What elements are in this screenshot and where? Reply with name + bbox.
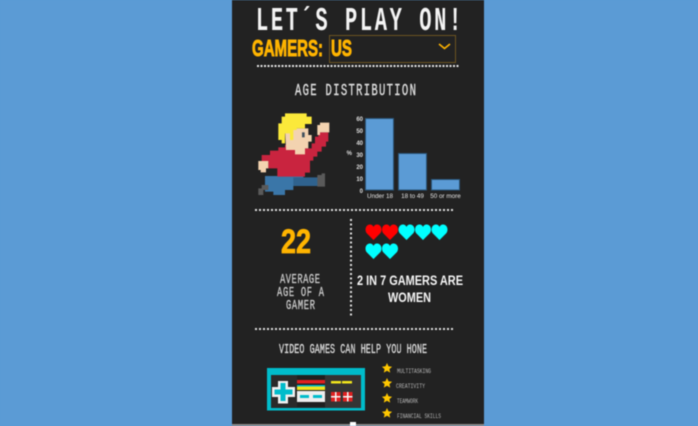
icon: stars <box>382 363 392 418</box>
y axis labels: 0 <box>360 189 364 195</box>
y axis labels: 30 <box>356 153 364 159</box>
stat: 2 in 7 gamers are women: WOMEN <box>388 290 431 305</box>
y axis labels: 20 <box>356 165 364 171</box>
x axis labels: Under 18 <box>367 193 393 200</box>
stat caption: AGE OF A <box>277 287 324 301</box>
chart bars <box>366 118 460 190</box>
selector label: GAMERS: <box>252 35 323 61</box>
stat: 2 in 7 gamers are women <box>357 273 463 305</box>
skill labels: CREATIVITY <box>396 383 425 390</box>
stat: average age <box>277 223 324 314</box>
heading: age distribution: AGE DISTRIBUTION <box>295 82 416 101</box>
skill labels: MULTITASKING <box>397 368 431 375</box>
stat caption: GAMER <box>286 300 315 314</box>
heading: skills: VIDEO GAMES CAN HELP YOU HONE <box>279 343 427 358</box>
skill labels: FINANCIAL SKILLS <box>397 413 441 420</box>
stat caption <box>277 274 324 314</box>
title: LET´S PLAY ON! <box>256 4 461 41</box>
x axis labels: 18 to 49 <box>401 193 424 200</box>
stat caption: AVERAGE <box>280 274 320 288</box>
icon: game controller <box>267 368 365 410</box>
y axis labels: 60 <box>356 117 364 123</box>
y axis labels: 10 <box>356 177 364 183</box>
stat: 2 in 7 gamers are women: 2 IN 7 GAMERS ARE <box>357 273 463 288</box>
skill labels <box>396 368 441 420</box>
stat value: 22 <box>281 223 311 261</box>
skills list <box>382 363 441 420</box>
hearts: women gamers <box>366 224 448 259</box>
y axis labels: % <box>347 151 353 157</box>
y axis labels: 40 <box>356 141 364 147</box>
skill labels: TEAMWORK <box>397 398 418 405</box>
y axis labels: 50 <box>356 129 364 135</box>
y axis labels <box>347 117 364 195</box>
selector value: US <box>331 35 352 61</box>
x axis labels: 50 or more <box>430 193 461 200</box>
icon: chevron <box>439 44 450 48</box>
x axis labels <box>367 193 461 200</box>
country selector <box>252 35 456 62</box>
icon: running pixel character <box>258 113 329 195</box>
selector box <box>330 36 456 62</box>
panel: infographic <box>232 0 484 426</box>
bar chart: age distribution <box>347 117 461 200</box>
